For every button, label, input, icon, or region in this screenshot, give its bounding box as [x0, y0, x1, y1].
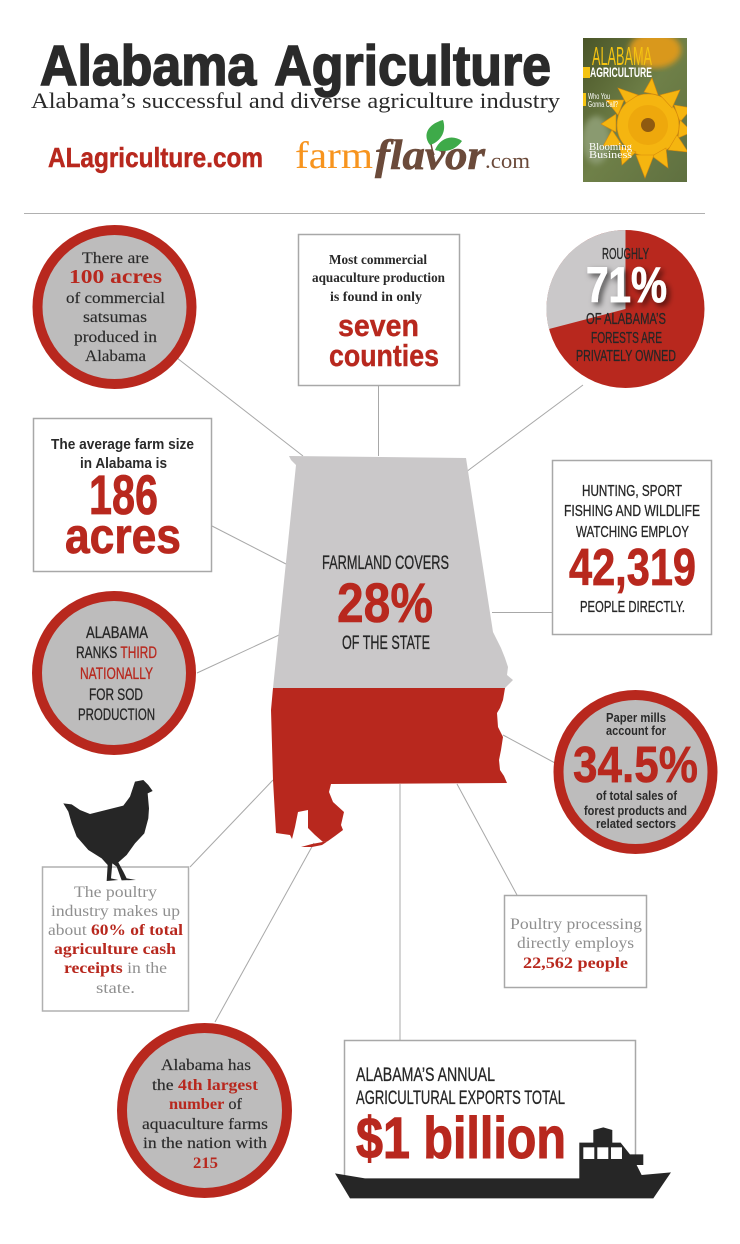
- circle: paper mills: account for: [606, 723, 666, 738]
- subtitle: Alabama’s successful and diverse agriculture industry: [31, 88, 560, 113]
- logo: ALagriculture.com: ALagriculture.com: [48, 142, 263, 173]
- pie chart: forests 71%: [546, 230, 704, 388]
- circle: satsumas: of commercial: [66, 290, 166, 307]
- circle: aquaculture farms: in the nation with: [143, 1135, 267, 1152]
- circle: paper mills: forest products and: [584, 803, 687, 818]
- circle: paper mills: of total sales of: [596, 788, 678, 803]
- box: hunting and fishing employment: PEOPLE DIRECTLY.: [580, 599, 685, 616]
- circle: sod production: NATIONALLY: [80, 664, 153, 683]
- box: poultry processing: [504, 896, 646, 988]
- map of Alabama: [271, 456, 513, 847]
- circle: aquaculture farms: 215: [193, 1155, 218, 1172]
- farmland text: OF THE STATE: [342, 632, 430, 654]
- box: aquaculture counties: aquaculture production: [312, 271, 445, 286]
- box: poultry cash receipts: about 60% of total: [48, 922, 184, 939]
- icon: chicken: [63, 780, 153, 881]
- box: poultry processing: Poultry processing: [510, 916, 642, 933]
- logo: farmflavor.com: .com: [485, 148, 530, 173]
- circle: aquaculture farms: number of: [169, 1096, 243, 1113]
- pie chart: forests 71%: OF ALABAMA’S: [586, 311, 666, 328]
- farmland text: FARMLAND COVERS: [322, 552, 449, 574]
- circle: paper mills: 34.5%: [573, 736, 698, 793]
- farmland text: 28%: [337, 571, 433, 634]
- magazine cover: Blooming: [589, 141, 632, 153]
- magazine cover: Business: [589, 149, 632, 161]
- box: hunting and fishing employment: 42,319: [569, 539, 696, 597]
- circle: satsumas: 100 acres: [69, 266, 162, 288]
- box: average farm size: in Alabama is: [80, 455, 167, 472]
- circle: aquaculture farms: Alabama has: [161, 1057, 251, 1074]
- box: poultry cash receipts: [42, 867, 188, 1011]
- box: average farm size: 186: [89, 463, 158, 526]
- circle: aquaculture farms: the 4th largest: [152, 1077, 259, 1094]
- box: agricultural exports: $1 billion: [356, 1106, 566, 1171]
- box: average farm size: acres: [65, 508, 181, 564]
- circle: satsumas: produced in: [74, 329, 157, 346]
- logo: farmflavor.com: flavor: [375, 133, 486, 179]
- box: aquaculture counties: is found in only: [330, 290, 422, 305]
- box: agricultural exports: AGRICULTURAL EXPORTS TOTAL: [356, 1088, 565, 1109]
- circle: paper mills: [558, 695, 712, 849]
- box: poultry processing: directly employs: [517, 935, 634, 952]
- magazine cover: [582, 32, 692, 182]
- circle: satsumas: [38, 230, 192, 384]
- box: hunting and fishing employment: WATCHING EMPLOY: [576, 524, 689, 541]
- circle: sod production: [37, 596, 191, 750]
- box: poultry cash receipts: receipts in the: [64, 960, 167, 977]
- logo: farmflavor.com: farm: [295, 135, 373, 177]
- box: agricultural exports: ALABAMA’S ANNUAL: [356, 1065, 495, 1086]
- magazine cover: ALABAMA: [592, 41, 652, 71]
- box: poultry cash receipts: industry makes up: [51, 903, 180, 920]
- circle: aquaculture farms: [122, 1028, 287, 1193]
- circle: satsumas: There are: [82, 250, 149, 267]
- box: poultry cash receipts: The poultry: [74, 884, 157, 901]
- magazine cover: AGRICULTURE: [590, 64, 652, 80]
- pie chart: forests 71%: 71%: [586, 257, 667, 313]
- box: poultry cash receipts: agriculture cash: [54, 941, 176, 958]
- box: hunting and fishing employment: HUNTING, SPORT: [582, 483, 682, 500]
- circle: sod production: RANKS THIRD: [76, 643, 157, 662]
- box: aquaculture counties: counties: [329, 338, 439, 373]
- pie chart: forests 71%: FORESTS ARE: [591, 330, 662, 347]
- box: agricultural exports: [344, 1040, 636, 1180]
- circle: sod production: FOR SOD: [89, 685, 143, 704]
- circle: satsumas: satsumas: [83, 309, 147, 326]
- circle: sod production: PRODUCTION: [78, 705, 155, 724]
- circle: aquaculture farms: aquaculture farms: [142, 1116, 268, 1133]
- box: hunting and fishing employment: [552, 460, 712, 634]
- circle: paper mills: related sectors: [596, 816, 676, 831]
- box: average farm size: [34, 418, 212, 572]
- farmland text: [322, 552, 449, 654]
- circle: satsumas: Alabama: [85, 348, 146, 365]
- pie chart: forests 71%: ROUGHLY: [602, 246, 649, 263]
- circle: paper mills: Paper mills: [606, 710, 666, 725]
- box: poultry cash receipts: state.: [96, 980, 135, 997]
- magazine cover: Gonna Call?: [588, 100, 618, 109]
- box: average farm size: The average farm size: [51, 436, 194, 453]
- magazine cover: Who You: [588, 92, 610, 101]
- box: aquaculture counties: Most commercial: [329, 253, 427, 268]
- title: Alabama Agriculture: [40, 34, 551, 98]
- box: poultry processing: 22,562 people: [523, 955, 628, 972]
- box: aquaculture counties: [298, 234, 460, 386]
- box: aquaculture counties: seven: [338, 308, 419, 343]
- logo: farmflavor.com: [295, 120, 530, 179]
- pie chart: forests 71%: PRIVATELY OWNED: [576, 348, 676, 365]
- box: hunting and fishing employment: FISHING AND WILDLIFE: [564, 503, 700, 520]
- circle: sod production: ALABAMA: [86, 623, 149, 642]
- icon: ship: [335, 1127, 671, 1198]
